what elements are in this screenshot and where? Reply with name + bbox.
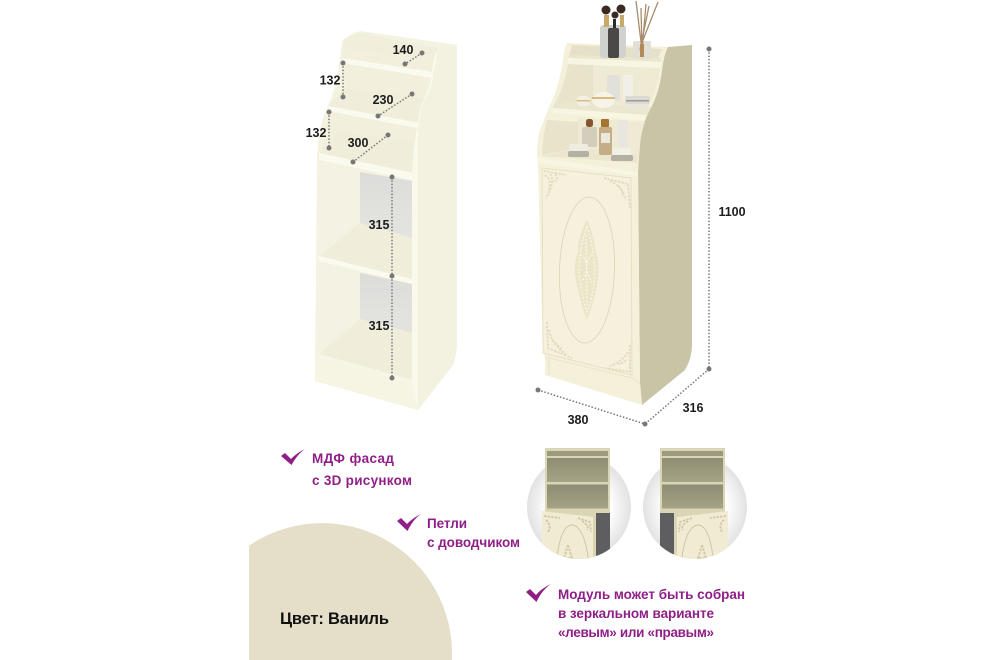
dimension lines left cabinet xyxy=(306,43,424,380)
dimension lines left cabinet: 132 xyxy=(320,74,340,88)
colour swatch: Цвет: Ваниль xyxy=(280,610,389,628)
feature: hinges: Петли xyxy=(427,516,467,531)
feature: hinges xyxy=(397,514,520,550)
dimension lines left cabinet: 132 xyxy=(306,126,326,140)
right cabinet front silhouette xyxy=(537,43,668,405)
dimension lines left cabinet: 230 xyxy=(373,93,393,107)
bottles lower shelf xyxy=(586,119,593,127)
feature: mirrored assembly: «левым» или «правым» xyxy=(558,625,714,640)
products on shelves xyxy=(568,1,658,161)
mirrored thumbnail left xyxy=(527,448,631,565)
right cabinet dimensions: 316 xyxy=(683,401,703,415)
diffuser xyxy=(633,41,651,59)
jars middle shelf xyxy=(607,75,620,101)
left cabinet with dimensions xyxy=(306,31,457,410)
right cabinet side xyxy=(638,45,692,405)
dimension lines left cabinet: 315 xyxy=(369,218,389,232)
right cabinet dimensions xyxy=(536,46,746,427)
right cabinet with door and products xyxy=(536,1,746,427)
mirrored thumbnail right xyxy=(643,448,747,565)
icon: check xyxy=(281,449,305,465)
icon: check xyxy=(526,584,551,602)
feature: MDF facade: с 3D рисунком xyxy=(312,473,412,488)
feature: MDF facade xyxy=(281,449,412,488)
feature: mirrored assembly xyxy=(526,584,745,640)
feature: mirrored assembly: Модуль может быть собран xyxy=(558,587,745,602)
dimension lines left cabinet: 300 xyxy=(348,136,368,150)
icon: check xyxy=(397,514,421,531)
right cabinet dimensions: 1100 xyxy=(718,205,746,219)
feature: hinges: с доводчиком xyxy=(427,535,520,550)
brush glass xyxy=(600,25,626,58)
door and plinth xyxy=(537,157,640,383)
shelf surfaces xyxy=(568,55,662,62)
right cabinet open shelves xyxy=(541,45,662,163)
right cabinet dimensions: 380 xyxy=(568,413,588,427)
feature: mirrored assembly: в зеркальном варианте xyxy=(558,606,714,621)
feature: MDF facade: МДФ фасад xyxy=(312,451,394,466)
left cabinet body xyxy=(315,31,457,410)
lower compartment backs xyxy=(360,172,412,238)
dimension lines left cabinet: 140 xyxy=(393,43,413,57)
colour swatch xyxy=(249,523,452,660)
front edge strip xyxy=(412,128,418,410)
shelves xyxy=(319,223,412,279)
dimension lines left cabinet: 315 xyxy=(369,319,389,333)
